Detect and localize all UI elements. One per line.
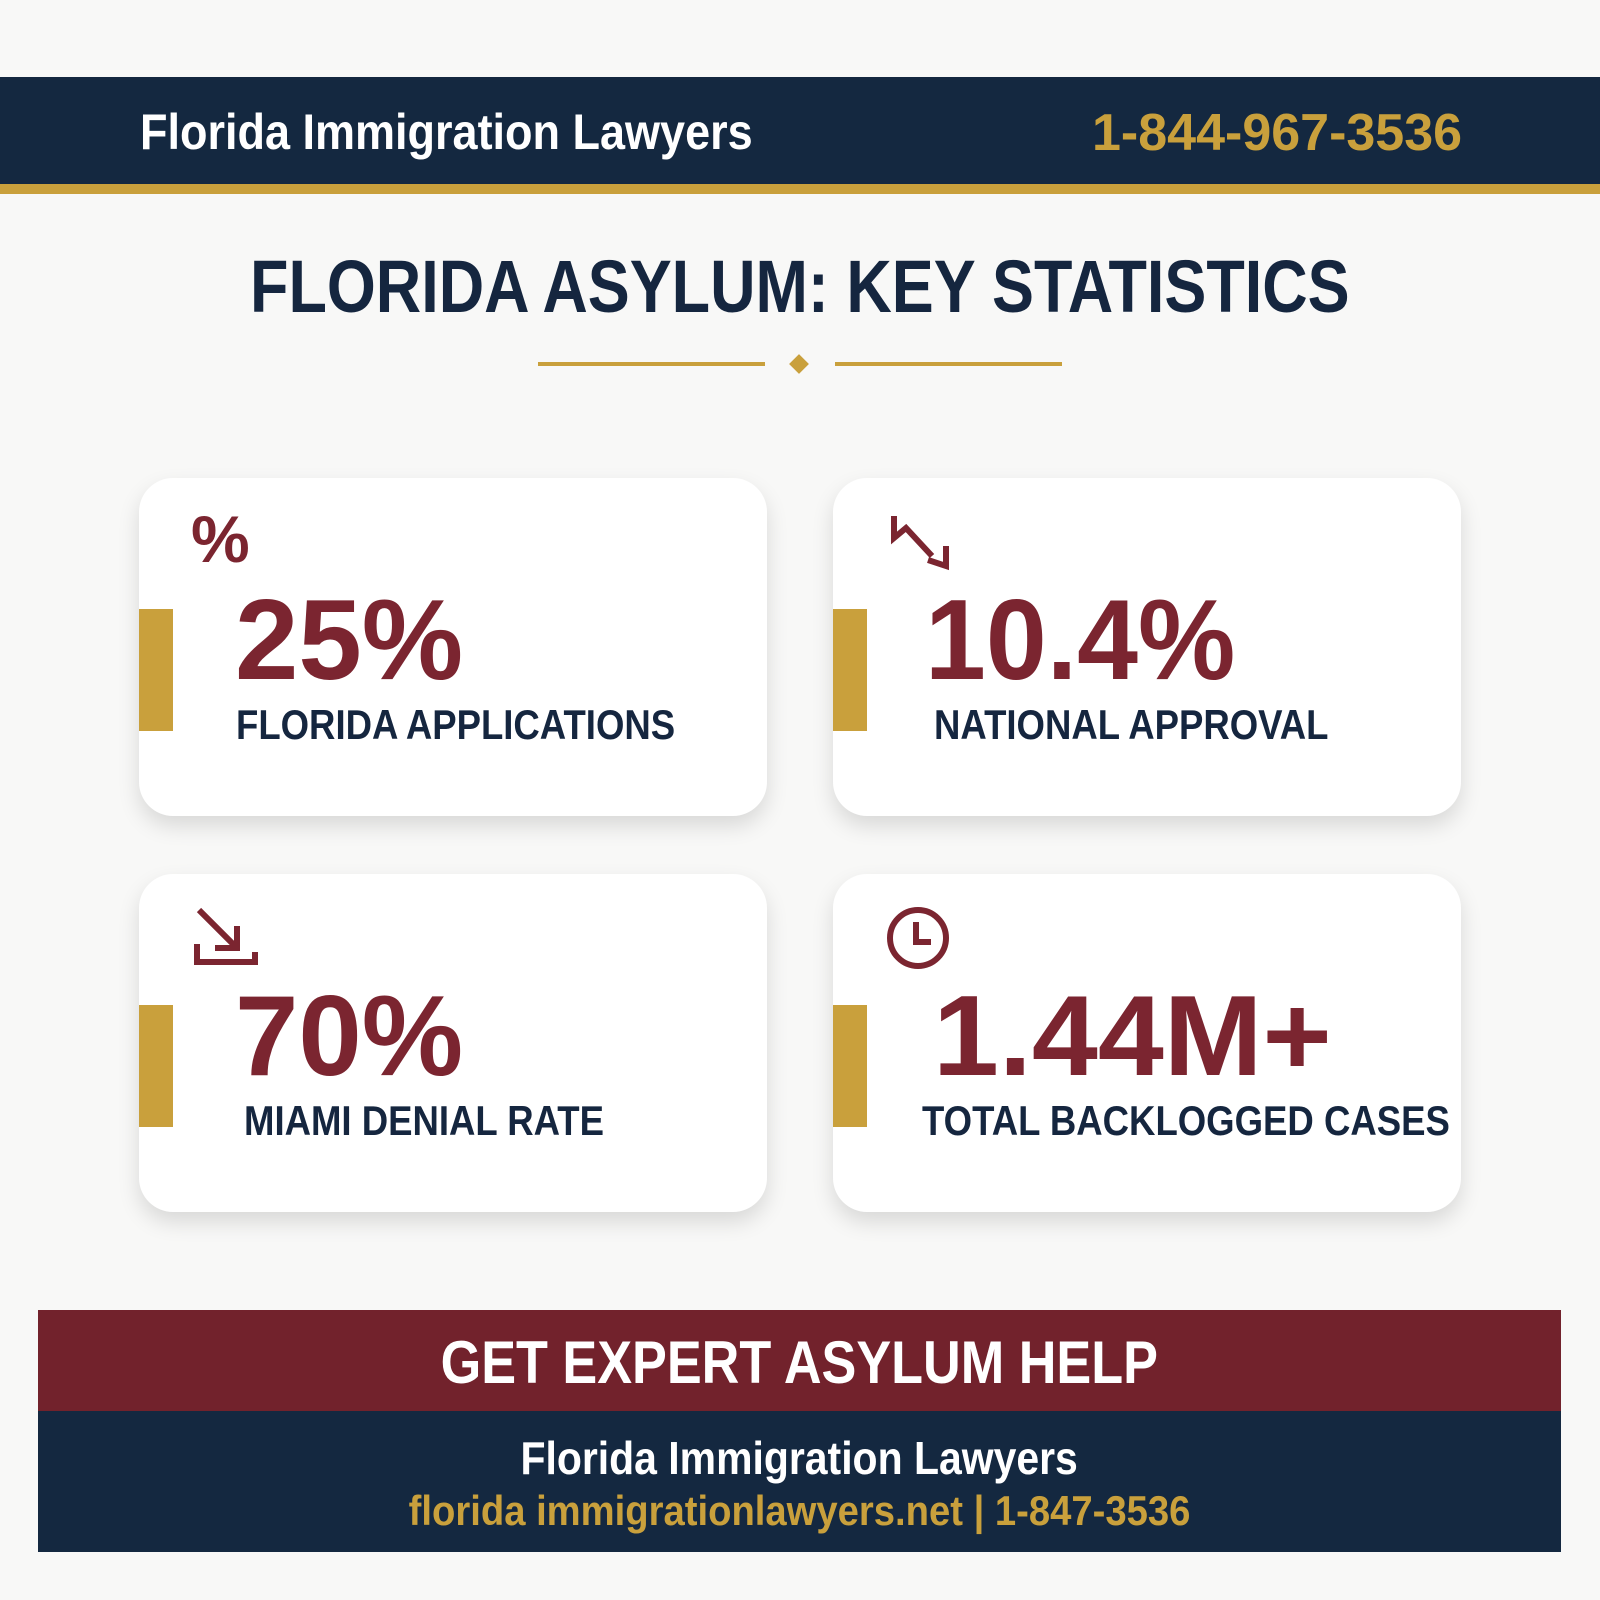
footer contact: florida immigrationlawyers.net | 1-847-3536 — [409, 1487, 1190, 1534]
icon: trend down — [891, 516, 949, 570]
label: FLORIDA APPLICATIONS — [236, 701, 675, 748]
stat 25%: 25% — [235, 577, 463, 704]
label: TOTAL BACKLOGGED CASES — [922, 1097, 1450, 1144]
stat 1.44M+: 1.44M+ — [933, 973, 1332, 1100]
icon: clock — [887, 907, 949, 969]
panel: miami denial rate — [139, 874, 767, 1212]
footer band — [38, 1411, 1561, 1552]
footer firm name: Florida Immigration Lawyers — [521, 1432, 1078, 1484]
label: MIAMI DENIAL RATE — [244, 1097, 604, 1144]
cta band — [38, 1310, 1561, 1411]
divider ornament — [538, 354, 1062, 374]
panel: total backlogged cases — [833, 874, 1461, 1212]
icon: arrow down — [194, 908, 258, 965]
stat 70%: 70% — [235, 973, 463, 1100]
header phone: 1-844-967-3536 — [1092, 104, 1462, 162]
label: NATIONAL APPROVAL — [934, 701, 1329, 748]
cta heading: GET EXPERT ASYLUM HELP — [441, 1329, 1158, 1396]
icon: percent: % — [191, 502, 250, 576]
header band — [0, 77, 1600, 194]
stat 10.4%: 10.4% — [925, 577, 1235, 704]
header firm name: Florida Immigration Lawyers — [140, 104, 753, 160]
panel: florida applications — [139, 478, 767, 816]
title: FLORIDA ASYLUM: KEY STATISTICS — [250, 245, 1350, 328]
panel: national approval — [833, 478, 1461, 816]
